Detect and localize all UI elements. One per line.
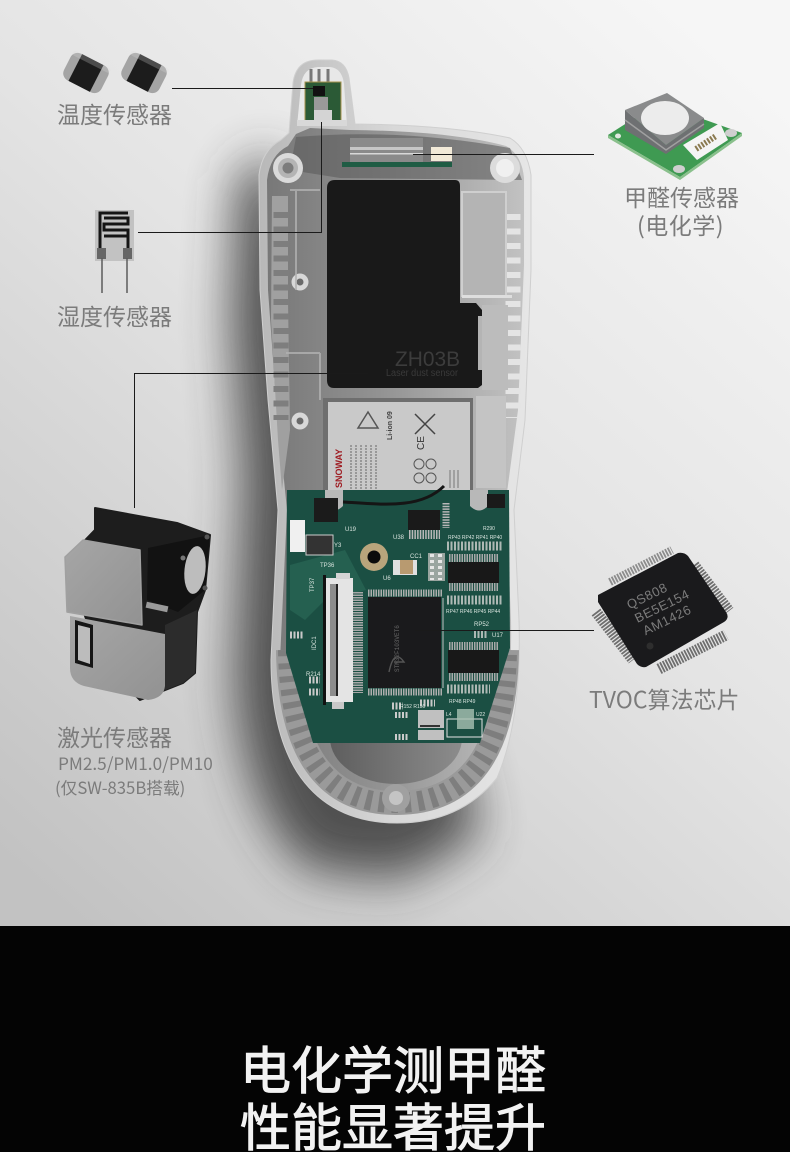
chip top right corner xyxy=(487,494,505,508)
chip body xyxy=(598,553,728,667)
processor marking: STM32F103VET6 xyxy=(394,625,401,672)
small components xyxy=(395,715,409,737)
silkscreen labels: U22 xyxy=(476,712,485,718)
U22 pad xyxy=(457,709,474,729)
board left parts xyxy=(290,635,435,706)
silkscreen labels: TP36 xyxy=(320,563,335,569)
label: electrochemical: (电化学) xyxy=(637,207,724,241)
title: 电化学测甲醛 xyxy=(240,1030,546,1104)
sensor window xyxy=(641,101,689,135)
left ribs xyxy=(286,190,320,400)
silkscreen labels: CC1 xyxy=(410,554,423,560)
silkscreen labels: R152 R150 xyxy=(400,704,426,710)
chip upper right xyxy=(448,558,499,587)
silkscreen labels xyxy=(306,526,504,718)
resistor arrays middle xyxy=(447,596,502,604)
module name: ZH03B xyxy=(395,348,460,371)
left vent fins xyxy=(274,212,288,420)
silkscreen labels: R290 xyxy=(483,526,495,532)
label: PM types: PM2.5/PM1.0/PM10 xyxy=(58,750,213,775)
silkscreen labels: RP52 xyxy=(474,622,490,628)
pin-one dot xyxy=(646,642,654,650)
lower body xyxy=(165,610,197,690)
recycle mark xyxy=(358,412,378,428)
pin array xyxy=(428,553,445,581)
black wire xyxy=(343,486,444,504)
chip marking xyxy=(624,580,694,638)
bottom band xyxy=(0,926,790,1152)
screw post left xyxy=(273,153,303,183)
black body xyxy=(66,508,210,700)
main processor xyxy=(368,593,443,692)
humidity sensor board xyxy=(297,69,347,126)
right pin header xyxy=(442,503,450,528)
silkscreen labels: U38 xyxy=(393,535,405,541)
top recess shade xyxy=(290,134,522,180)
battery note xyxy=(450,470,458,488)
circuit board xyxy=(286,486,510,743)
CE mark: CE xyxy=(416,436,427,450)
bottom screw post xyxy=(382,784,410,812)
silkscreen labels: U6 xyxy=(383,576,391,582)
chip marking: QS808 xyxy=(624,580,670,612)
battery icons xyxy=(414,459,436,483)
silkscreen labels: U19 xyxy=(345,527,357,533)
metal block xyxy=(625,110,704,154)
power inductor L4 xyxy=(418,710,444,740)
connector xyxy=(75,620,93,668)
silkscreen labels: RP48 RP49 xyxy=(449,699,476,705)
lower plate xyxy=(70,616,165,700)
board notches xyxy=(325,490,488,510)
green board xyxy=(608,103,742,177)
ribbon connector xyxy=(323,573,358,709)
icon: TVOC chip xyxy=(596,550,729,669)
device housing xyxy=(259,60,531,823)
battery brand: SNOWAY xyxy=(334,449,344,488)
label: temperature sensor: 温度传感器 xyxy=(57,96,172,130)
label: formaldehyde sensor xyxy=(624,179,739,241)
silkscreen labels: TP37 xyxy=(310,577,316,592)
mounting hole xyxy=(360,543,388,571)
device shadow xyxy=(230,150,480,880)
title xyxy=(240,1030,546,1152)
chip marking: BE5E154 xyxy=(632,586,692,626)
U22 outline xyxy=(447,719,482,737)
chip U19 xyxy=(314,498,338,522)
label: humidity sensor: 湿度传感器 xyxy=(57,298,172,332)
battery xyxy=(323,398,473,492)
icon: temperature sensor pair xyxy=(60,50,170,96)
interior cavity xyxy=(267,128,524,812)
label: TVOC chip: TVOC算法芯片 xyxy=(589,681,740,715)
capacitor CC1 xyxy=(393,560,417,575)
leader line: TVOC chip xyxy=(415,630,594,632)
battery model: Li-ion 09 xyxy=(387,411,394,440)
crystal Y3 xyxy=(306,535,333,555)
silkscreen labels: R214 xyxy=(306,672,321,678)
spacer cylinder xyxy=(146,602,168,612)
chip lower right xyxy=(448,646,499,677)
label: model note: (仅SW-835B搭载) xyxy=(55,775,185,799)
bottom fin ring xyxy=(288,650,507,812)
laser dust module xyxy=(327,180,482,388)
leader line: laser sensor xyxy=(134,374,368,508)
label: laser sensor: 激光传感器 xyxy=(57,719,172,753)
icon: humidity sensor xyxy=(95,210,134,293)
formaldehyde sensor in housing xyxy=(342,138,452,167)
pins xyxy=(596,565,729,669)
silkscreen labels: IDC1 xyxy=(312,636,318,650)
right compartment xyxy=(462,192,512,488)
chip U38 xyxy=(408,510,440,534)
silkscreen labels: Y3 xyxy=(334,543,342,549)
silkscreen labels: RP47 RP46 RP45 RP44 xyxy=(446,609,500,615)
processor logo xyxy=(389,657,404,672)
module subtitle: Laser dust sensor xyxy=(386,368,459,379)
resistor arrays low xyxy=(447,684,490,694)
screw post mid upper xyxy=(292,274,308,290)
icon: laser sensor xyxy=(65,508,210,700)
left ceramic cap xyxy=(60,50,112,96)
right ceramic cap xyxy=(118,50,170,96)
mount holes xyxy=(673,165,685,173)
antenna tip xyxy=(297,67,347,126)
RP52 xyxy=(474,630,488,638)
right vent fins xyxy=(506,214,520,418)
chip marking: AM1426 xyxy=(640,602,694,638)
silkscreen labels: RP43 RP42 RP41 RP40 xyxy=(448,535,502,541)
fan xyxy=(147,534,210,612)
battery fine print xyxy=(351,445,376,490)
leader line: formaldehyde sensor xyxy=(413,154,594,156)
outer shell xyxy=(259,60,531,823)
connector xyxy=(683,123,728,160)
label: formaldehyde sensor: 甲醛传感器 xyxy=(624,179,739,213)
lighter copper area xyxy=(290,550,366,620)
bin mark xyxy=(415,414,435,434)
faint top pins xyxy=(610,550,672,582)
leader line: temperature sensor xyxy=(172,88,313,90)
upper plate xyxy=(65,540,142,625)
resistor arrays top xyxy=(447,542,502,550)
leader line: humidity sensor xyxy=(138,122,322,232)
handle opening xyxy=(330,692,462,784)
white connector pad xyxy=(290,520,305,552)
screw post right xyxy=(490,153,520,183)
left vent backing xyxy=(271,196,290,490)
silkscreen labels: U17 xyxy=(492,633,504,639)
screw post mid lower xyxy=(292,412,308,430)
icon: formaldehyde sensor xyxy=(608,93,742,180)
silkscreen labels: L4 xyxy=(446,712,452,718)
